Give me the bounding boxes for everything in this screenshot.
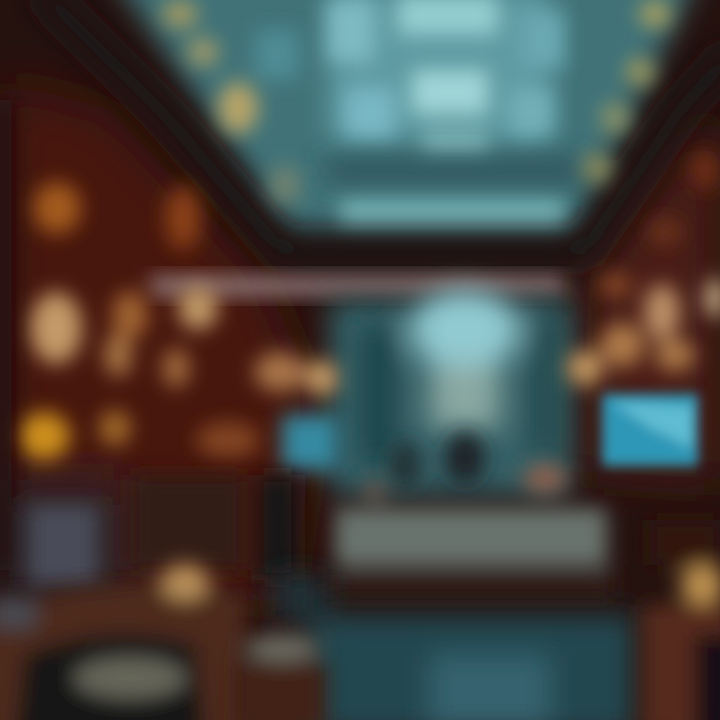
left amber lamps xyxy=(18,182,338,460)
ceiling beams xyxy=(40,0,720,250)
window figures xyxy=(389,432,485,489)
right blue screen xyxy=(602,394,698,466)
glass ceiling xyxy=(110,0,700,235)
right warm lamps xyxy=(567,150,720,386)
right foreground chair xyxy=(642,520,720,720)
window glow xyxy=(360,290,558,465)
left wall xyxy=(0,80,320,600)
central table xyxy=(330,464,615,598)
ceiling panes xyxy=(255,0,565,228)
right wall xyxy=(580,110,720,480)
floor xyxy=(272,575,635,720)
left blue screen xyxy=(282,415,338,470)
pink lintel band xyxy=(150,276,565,296)
dark left pillar and figure xyxy=(0,100,298,585)
foreground side table xyxy=(235,634,325,720)
ceiling gold lights xyxy=(162,0,671,205)
left foreground chair xyxy=(0,564,245,720)
back window xyxy=(330,300,570,495)
